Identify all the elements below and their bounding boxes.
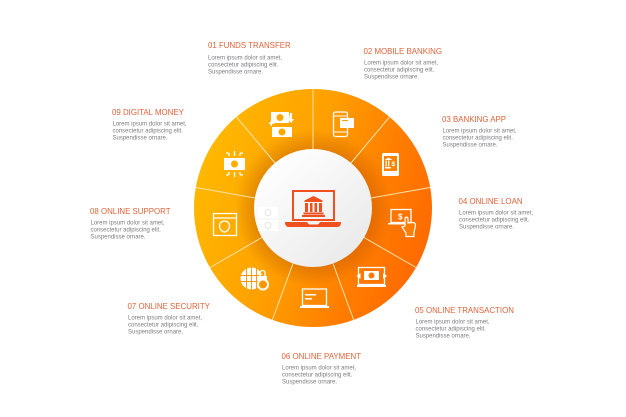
text: 09 digital money xyxy=(112,108,187,142)
icon: 08 online support xyxy=(214,214,236,236)
icon: 07 online security xyxy=(240,268,268,290)
text: 06 online payment: Suspendisse ornare. xyxy=(282,380,337,386)
text: 08 online support xyxy=(90,207,171,240)
text: 01 funds transfer xyxy=(208,41,291,76)
text: 03 banking app: Suspendisse ornare. xyxy=(442,142,498,148)
text: 08 online support: Lorem ipsum dolor sit amet, xyxy=(90,220,165,226)
text: 06 online payment: Lorem ipsum dolor sit amet, xyxy=(282,366,356,372)
text: 04 online loan: 04 ONLINE LOAN xyxy=(458,197,523,206)
icon: 03 banking app xyxy=(382,153,399,176)
donut chart xyxy=(194,89,432,327)
icon: 04 online loan: $ xyxy=(398,212,403,222)
text: 01 funds transfer: Lorem ipsum dolor sit amet, xyxy=(208,56,282,62)
text: 03 banking app: Lorem ipsum dolor sit amet, xyxy=(442,128,517,134)
text: 06 online payment: consectetur adipiscing elit. xyxy=(282,372,353,378)
icon: 02 mobile banking xyxy=(334,112,354,136)
text: 03 banking app: consectetur adipiscing elit. xyxy=(442,136,513,142)
text: 05 online transaction: Suspendisse ornare. xyxy=(416,334,471,340)
text: 09 digital money: Lorem ipsum dolor sit amet, xyxy=(112,122,187,128)
text: 04 online loan: consectetur adipiscing elit. xyxy=(459,218,530,224)
text: 04 online loan xyxy=(458,197,533,230)
text: 03 banking app: 03 BANKING APP xyxy=(442,115,506,124)
text: 08 online support: 08 ONLINE SUPPORT xyxy=(90,207,171,216)
text: 04 online loan: Suspendisse ornare. xyxy=(459,224,514,230)
icon: 09 digital money xyxy=(224,151,245,177)
text: 02 mobile banking: Suspendisse ornare. xyxy=(364,74,419,80)
text: 09 digital money: 09 DIGITAL MONEY xyxy=(112,108,185,117)
text: 07 online security: Lorem ipsum dolor sit amet, xyxy=(128,316,202,322)
text: 04 online loan: Lorem ipsum dolor sit amet, xyxy=(459,210,533,216)
text: 06 online payment: 06 ONLINE PAYMENT xyxy=(282,352,361,361)
text: 08 online support: consectetur adipiscing elit. xyxy=(90,228,161,234)
text: 05 online transaction xyxy=(415,306,514,340)
text: 03 banking app xyxy=(442,115,517,148)
text: 07 online security xyxy=(128,302,211,336)
icon: laptop with bank xyxy=(285,190,341,227)
center circle xyxy=(254,149,372,267)
text: 07 online security: 07 ONLINE SECURITY xyxy=(128,302,211,311)
text: 01 funds transfer: consectetur adipiscing elit. xyxy=(208,62,279,68)
text: 02 mobile banking xyxy=(364,47,442,80)
text: 05 online transaction: 05 ONLINE TRANSACTION xyxy=(415,306,514,315)
text: 02 mobile banking: consectetur adipiscing elit. xyxy=(364,68,435,74)
text: 09 digital money: consectetur adipiscing elit. xyxy=(112,128,183,134)
icon: 05 online transaction xyxy=(356,268,387,287)
icon: 04 online loan xyxy=(388,210,416,236)
icon: faint banknotes on center circle xyxy=(258,207,278,231)
icon: 03 banking app: $ xyxy=(392,161,396,168)
text: 01 funds transfer: 01 FUNDS TRANSFER xyxy=(208,41,291,50)
text: 08 online support: Suspendisse ornare. xyxy=(90,234,146,240)
text: 06 online payment xyxy=(282,352,361,386)
text: 09 digital money: Suspendisse ornare. xyxy=(112,136,168,142)
text: 02 mobile banking: 02 MOBILE BANKING xyxy=(364,47,442,56)
donut ring xyxy=(194,89,432,327)
text: 07 online security: Suspendisse ornare. xyxy=(128,330,183,336)
text: 02 mobile banking: Lorem ipsum dolor sit amet, xyxy=(364,60,438,66)
text: 05 online transaction: consectetur adipiscing elit. xyxy=(416,326,486,332)
icon: 01 funds transfer xyxy=(268,112,294,137)
text: 07 online security: consectetur adipiscing elit. xyxy=(128,322,199,328)
text: 01 funds transfer: Suspendisse ornare. xyxy=(208,70,263,76)
icon: 06 online payment xyxy=(300,289,329,308)
text: 05 online transaction: Lorem ipsum dolor sit amet, xyxy=(416,320,490,326)
